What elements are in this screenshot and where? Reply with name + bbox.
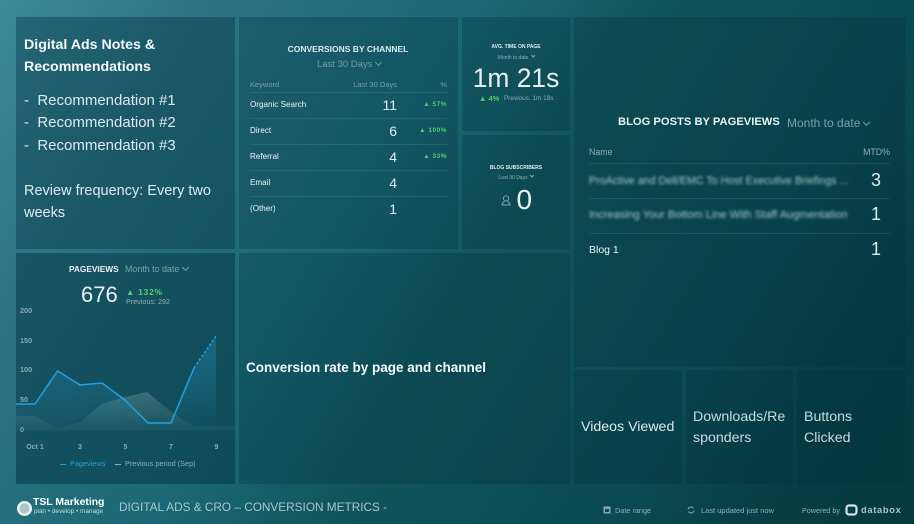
logo: TSL Marketing: plan • develop • manage	[34, 508, 103, 515]
row: other: (Other)	[250, 204, 276, 213]
pageviews change: ▲ 132%	[126, 287, 163, 297]
icon: person	[502, 195, 510, 206]
panel: notes	[16, 17, 235, 249]
row: direct: Direct	[250, 126, 271, 135]
panel: videos viewed	[574, 370, 682, 484]
panel: conversions by channel	[239, 17, 458, 249]
recommendations list: - Recommendation #2	[24, 114, 176, 131]
panel: blog posts by pageviews: MTD%	[863, 146, 890, 156]
subscribers period: Last 90 Days	[498, 175, 528, 181]
powered by databox: Powered by	[802, 506, 840, 515]
y axis labels: 100	[20, 365, 32, 374]
conversions table: ▲ 57%	[423, 101, 447, 108]
row: blog 1: Blog 1	[589, 244, 619, 256]
icon: databox	[845, 504, 858, 516]
y axis labels: 50	[20, 395, 28, 404]
pageviews heading: PAGEVIEWS	[69, 264, 119, 274]
conversions table: %	[440, 80, 447, 89]
x axis labels: 7	[169, 444, 173, 451]
videos label: Videos Viewed	[581, 419, 674, 435]
conversions table: ▲ 100%	[419, 127, 447, 134]
conversions table: Last 30 Days	[353, 80, 397, 89]
conversions table: Keyword	[250, 80, 279, 89]
panel: average time on page	[462, 17, 570, 131]
icon: refresh	[688, 506, 694, 514]
y axis labels: 0	[20, 425, 24, 434]
pageviews previous: Previous: 292	[126, 297, 170, 306]
panel: conversion rate	[239, 253, 570, 484]
panel: blog posts by pageviews: 1	[871, 204, 881, 224]
powered by databox	[802, 504, 902, 516]
chart legend	[60, 459, 196, 468]
conversion rate label: Conversion rate by page and channel	[246, 360, 486, 375]
x axis labels	[26, 444, 218, 451]
y axis labels	[20, 306, 32, 434]
buttons label	[804, 409, 852, 446]
subscribers heading: BLOG SUBSCRIBERS	[490, 165, 542, 171]
avg time previous: Previous: 1m 18s	[504, 95, 553, 102]
row: blurred post 1: ProActive and Dell/EMC To Host Executive Briefings ...	[589, 174, 848, 186]
panel: buttons clicked	[797, 370, 905, 484]
conversions heading: CONVERSIONS BY CHANNEL	[288, 44, 408, 54]
icon: TSL ring	[17, 501, 32, 516]
blog heading: BLOG POSTS BY PAGEVIEWS	[618, 116, 780, 128]
blog period selector: Month to date	[787, 116, 860, 130]
review frequency: weeks	[24, 205, 65, 221]
downloads label: Downloads/Re	[693, 409, 785, 425]
panel: blog posts by pageviews: 3	[871, 170, 881, 190]
chart legend: Previous period (Sep)	[125, 459, 196, 468]
pageviews projected line	[194, 336, 216, 368]
logo: TSL Marketing: TSL Marketing	[33, 497, 104, 508]
y axis labels: 150	[20, 336, 32, 345]
row: referral: Referral	[250, 152, 279, 161]
icon: calendar	[604, 506, 610, 514]
avg time value: 1m 21s	[473, 63, 559, 93]
conversions table: ▲ 33%	[423, 153, 447, 160]
review frequency: Review frequency: Every two	[24, 183, 211, 199]
blog table header: Name	[589, 146, 612, 156]
avg time heading: AVG. TIME ON PAGE	[491, 44, 541, 50]
x axis labels: 3	[78, 444, 82, 451]
date range: Date range	[615, 506, 651, 515]
panel: downloads	[686, 370, 793, 484]
chart legend: Pageviews	[70, 459, 105, 468]
panel: blog posts by pageviews	[574, 17, 905, 367]
notes heading	[24, 37, 155, 75]
logo: TSL Marketing	[17, 497, 104, 516]
pageviews value: 676	[81, 282, 118, 307]
line chart: pageviews	[16, 306, 235, 434]
conversions table: 1	[389, 201, 397, 217]
conversions period selector: Last 30 Days	[317, 59, 372, 70]
pageviews area	[16, 336, 216, 431]
panel: pageviews	[16, 253, 235, 484]
y axis labels: 200	[20, 306, 32, 315]
previous period area	[16, 392, 235, 431]
notes heading: Digital Ads Notes &	[24, 37, 155, 53]
pageviews line	[16, 368, 194, 423]
conversions table: 4	[389, 175, 397, 191]
row: organic search: Organic Search	[250, 100, 306, 109]
avg time period: Month to date	[498, 55, 528, 61]
buttons label: Buttons	[804, 409, 852, 425]
x axis labels: 5	[124, 444, 127, 451]
conversions table: 4	[389, 149, 397, 165]
conversions table: 6	[389, 123, 397, 139]
recommendations list	[24, 92, 176, 154]
last updated: Last updated just now	[701, 506, 774, 515]
dashboard title: DIGITAL ADS & CRO – CONVERSION METRICS -	[119, 500, 387, 514]
downloads label: sponders	[693, 430, 751, 446]
notes heading: Recommendations	[24, 59, 151, 75]
review frequency	[24, 183, 211, 221]
recommendations list: - Recommendation #3	[24, 137, 176, 154]
conversions table: 11	[382, 97, 397, 113]
downloads label	[693, 409, 785, 446]
row: email: Email	[250, 178, 270, 187]
recommendations list: - Recommendation #1	[24, 92, 176, 109]
footer	[17, 497, 902, 516]
subscribers value: 0	[516, 184, 532, 215]
x axis labels: 9	[215, 444, 218, 451]
row: blurred post 2: Increasing Your Bottom Line With Staff Augmentation	[589, 208, 847, 220]
pageviews period: Month to date	[125, 264, 179, 274]
buttons label: Clicked	[804, 430, 851, 446]
x axis labels: Oct 1	[26, 444, 44, 451]
panel: blog posts by pageviews: 1	[871, 239, 881, 259]
avg time change: ▲ 4%	[479, 94, 499, 103]
panel: blog subscribers	[462, 135, 570, 249]
conversions table	[250, 80, 447, 217]
powered by databox: databox	[861, 504, 902, 514]
